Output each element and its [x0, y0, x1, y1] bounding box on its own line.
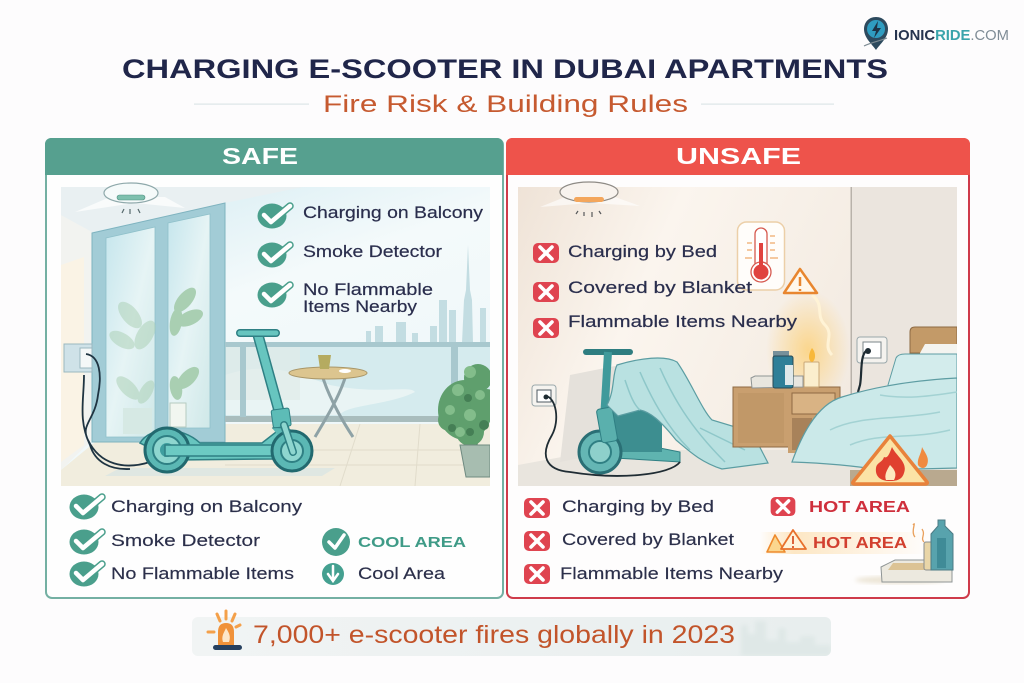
illustration: bedroom scene [518, 187, 957, 486]
stat banner [192, 611, 831, 656]
window pane right [168, 214, 210, 428]
wall socket left [532, 385, 556, 406]
hot area badge: HOT AREA [809, 499, 910, 516]
unsafe list: Charging by Bed [562, 498, 714, 516]
plant in pot [438, 364, 490, 478]
icon: warning triangle [784, 269, 817, 293]
overlay checklist: unsafe [533, 242, 798, 338]
overlay checklist: safe: Items Nearby [303, 297, 418, 316]
icon: siren [208, 611, 242, 650]
overlay checklist: safe: Charging on Balcony [303, 203, 484, 222]
right wall section [852, 187, 933, 366]
cool area icon and label: Cool Area [358, 565, 446, 583]
floor [61, 424, 490, 486]
title: CHARGING E-SCOOTER IN DUBAI APARTMENTS [122, 54, 888, 84]
cool area icon and label [322, 563, 446, 585]
left wall [61, 215, 92, 470]
indoor plant reflection [106, 284, 206, 434]
banner city silhouette [741, 621, 831, 656]
window frame [92, 203, 225, 442]
cool area badge [322, 528, 466, 556]
scooter [140, 333, 312, 472]
cable right [858, 351, 866, 392]
scooter shadow on wall [560, 366, 616, 458]
window pane left [106, 227, 155, 437]
safe list: Smoke Detector [111, 532, 261, 550]
overlay checklist: safe: No Flammable [303, 280, 433, 299]
balcony sky [61, 187, 490, 486]
panel: safe [45, 138, 503, 598]
overlay checklist: safe [258, 203, 484, 316]
candle [804, 348, 819, 387]
heat squiggle [812, 295, 832, 355]
smoke detector [75, 183, 185, 214]
overlay checklist: unsafe: Charging by Bed [568, 242, 717, 261]
illustration: balcony scene [61, 187, 502, 486]
unsafe list [524, 497, 953, 584]
unsafe list: Flammable Items Nearby [560, 565, 784, 583]
safe list [70, 494, 466, 586]
blanket [607, 358, 768, 469]
stat text: 7,000+ e-scooter fires globally in 2023 [253, 621, 735, 649]
hot area warning row: HOT AREA [813, 535, 907, 552]
logo wordmark: IONICRIDE.COM [894, 27, 1009, 44]
icon: thermometer card [738, 222, 784, 290]
heat glow [770, 296, 846, 386]
logo: IonicRide.com [864, 17, 1009, 50]
cool area badge: COOL AREA [358, 534, 466, 551]
charging cable [82, 354, 150, 469]
ceiling [61, 187, 262, 232]
unsafe header: UNSAFE [676, 143, 801, 169]
floor [518, 450, 851, 486]
charging cable left [546, 396, 680, 476]
bed [792, 327, 957, 486]
nightstand [733, 387, 840, 453]
scooter mat shadow [105, 468, 335, 476]
safe list: No Flammable Items [111, 565, 294, 583]
balcony railing [225, 342, 490, 422]
scooter covered [579, 352, 680, 473]
hot area badge [771, 497, 910, 516]
sea view [225, 345, 490, 419]
city skyline [366, 245, 486, 344]
books [751, 376, 803, 388]
overlay checklist: unsafe: Covered by Blanket [568, 278, 752, 297]
icon: fire warning [853, 436, 928, 484]
safe header: SAFE [222, 143, 298, 169]
bottle on nightstand [773, 351, 793, 388]
hot area warning row [760, 530, 930, 554]
unsafe header [506, 138, 970, 175]
table with mug [289, 355, 367, 437]
safe header [45, 138, 503, 175]
wall socket right [857, 337, 887, 363]
power outlet [64, 344, 92, 372]
flammable items: bottle and books [855, 520, 953, 584]
subtitle with rules: Fire Risk & Building Rules [323, 91, 688, 118]
icon: location pin with bolt [864, 17, 888, 50]
overlay checklist: unsafe: Flammable Items Nearby [568, 312, 798, 331]
unsafe list: Covered by Blanket [562, 531, 734, 549]
bedroom wall [518, 187, 850, 465]
safe list: Charging on Balcony [111, 498, 303, 516]
smoke detector alert [540, 182, 640, 217]
overlay checklist: safe: Smoke Detector [303, 242, 442, 261]
panel: unsafe [506, 138, 970, 598]
